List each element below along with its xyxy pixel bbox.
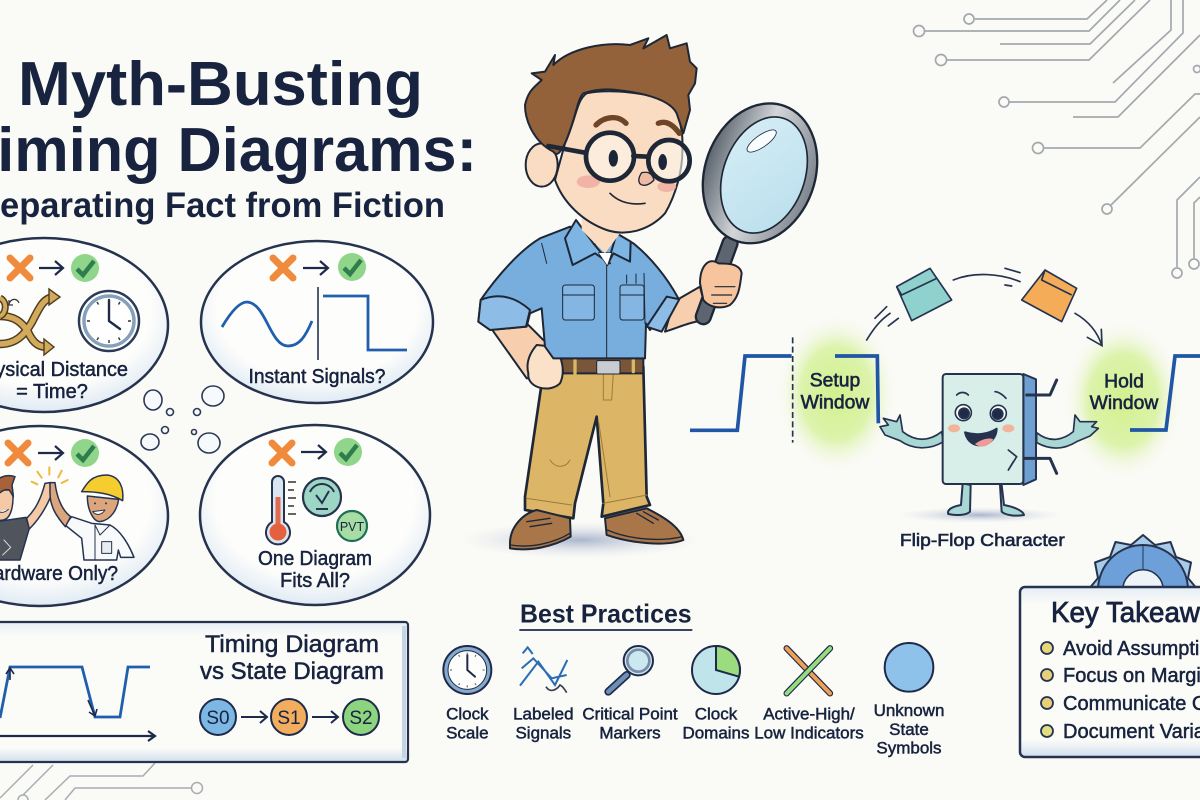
item: labeled signals: Signals [515, 723, 571, 742]
item: clock scale [443, 646, 491, 742]
neck [582, 217, 620, 253]
diagram: state transitions: S1 [277, 708, 301, 729]
icon: winding signal routes [0, 289, 60, 355]
eyes, nose and mouth [609, 150, 618, 167]
glasses [548, 133, 690, 181]
title [0, 50, 477, 225]
setup boundary dashed line [790, 337, 795, 443]
item: unknown state symbols: Symbols [876, 738, 942, 757]
bubble: instant signals myth [201, 241, 433, 403]
label: hold window [1090, 371, 1158, 414]
pins [1025, 380, 1057, 473]
label: hold window: Window [1090, 393, 1158, 414]
illustration: software and hardware engineers high five [0, 467, 134, 560]
icon: PVT badge [337, 511, 367, 541]
item: unknown state symbols [874, 643, 944, 757]
item: active-high low indicators: Low Indicators [754, 723, 864, 742]
belt [560, 358, 643, 373]
icon: wrong to right [10, 254, 99, 282]
decorative circuit traces bottom left [0, 763, 202, 800]
decorative circuit traces top right [914, 0, 1200, 278]
icon: orange data packet [1022, 270, 1077, 322]
panel: key takeaways [1020, 587, 1200, 757]
data transfer arcs [867, 268, 1102, 346]
item: clock domains: Domains [682, 723, 750, 742]
setup window glow [778, 317, 895, 470]
chart: timing waveform [0, 667, 155, 741]
icon: gauge [303, 478, 341, 516]
icon: wrong to right [8, 439, 99, 467]
magnifying glass [684, 87, 836, 317]
text: physical distance: = Time? [16, 381, 88, 403]
item: critical point markers: Critical Point [582, 704, 678, 723]
item: critical point markers [582, 646, 678, 742]
heading: timing vs state: Timing Diagram [205, 631, 379, 658]
hold window glow [1066, 323, 1181, 477]
icon: thermometer [266, 476, 296, 544]
item: critical point markers: Markers [599, 723, 661, 742]
diagram: state transitions [200, 699, 379, 735]
legs [948, 483, 1024, 516]
shirt torso [478, 227, 678, 358]
icon: clock [79, 291, 139, 351]
item: unknown state symbols: Unknown [874, 701, 944, 720]
diagram: state transitions: S0 [206, 708, 230, 729]
label: setup window: Window [801, 392, 869, 413]
left engineer [0, 476, 51, 560]
left arm [490, 323, 562, 378]
text: one diagram fits all [258, 548, 372, 592]
icon: wrong to right [272, 438, 362, 466]
shoes [510, 510, 571, 549]
arms [880, 415, 943, 448]
pants [525, 367, 650, 518]
heading: best practices: Best Practices [520, 599, 692, 629]
text: one diagram fits all: One Diagram [258, 548, 372, 570]
panel: timing diagram vs state diagram [0, 622, 408, 762]
item: active-high low indicators: Active-High/ [763, 704, 855, 723]
hair [525, 35, 697, 154]
face [555, 91, 682, 233]
item: labeled signals: Labeled [513, 704, 574, 723]
item: clock scale: Clock [446, 704, 489, 723]
spark lines [32, 467, 68, 484]
label: hold window: Hold [1104, 371, 1144, 392]
bubble: one diagram myth [200, 425, 430, 605]
title: Myth-Busting [18, 50, 423, 119]
brows [596, 118, 679, 133]
item: clock domains: Clock [695, 704, 738, 723]
text: one diagram fits all: Fits All? [280, 570, 350, 592]
clock signal segments [690, 356, 1200, 430]
right engineer [50, 475, 134, 560]
diagram: state transitions: S2 [349, 708, 373, 729]
body [943, 374, 1023, 484]
item: clock domains [682, 646, 750, 742]
text: physical distance [0, 359, 128, 403]
icon: PVT badge: PVT [340, 520, 365, 534]
item: clock scale: Scale [446, 723, 489, 742]
illustration: setup hold and flip-flop [690, 268, 1200, 550]
bubble: physical distance myth [0, 238, 168, 412]
icon: gear behind takeaways [1088, 535, 1198, 590]
ear [526, 143, 558, 187]
thought bubble connectors [141, 386, 224, 453]
label: setup window [801, 371, 869, 413]
label: flip-flop character: Flip-Flop Character [900, 530, 1065, 550]
item: active-high low indicators [754, 648, 864, 742]
heading: timing vs state [200, 631, 384, 685]
right forearm and cuff [665, 287, 705, 332]
icon: teal data packet [897, 268, 952, 321]
text: instant signals: Instant Signals? [248, 366, 386, 388]
ground shadow [460, 522, 700, 558]
illustration: engineer with magnifying glass [460, 35, 836, 558]
side [1023, 374, 1036, 485]
label: setup window: Setup [810, 371, 860, 392]
chart: sine versus square signal [222, 287, 407, 360]
bubble: hardware only myth [0, 426, 168, 606]
section: best practices [443, 599, 944, 757]
takeaway list [1041, 638, 1200, 743]
icon: wrong to right [273, 253, 366, 281]
face [957, 392, 1006, 398]
flip-flop character [880, 374, 1098, 523]
gripping hand [700, 261, 742, 307]
heading: timing vs state: vs State Diagram [200, 658, 384, 685]
item: labeled signals [513, 647, 574, 742]
item: unknown state symbols: State [889, 720, 929, 739]
